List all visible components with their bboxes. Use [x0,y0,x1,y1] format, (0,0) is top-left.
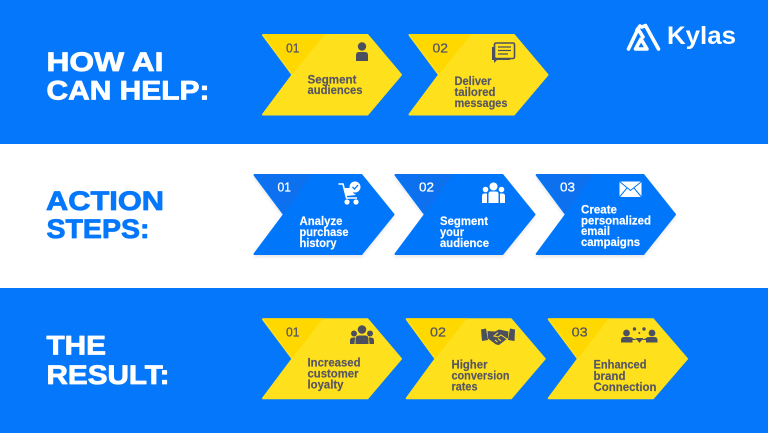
card: increased customer loyalty: customer [308,369,359,381]
icon: envelope [620,182,642,197]
card: higher conversion rates: Higher [452,360,488,372]
card: increased customer loyalty: Increased [308,358,360,370]
heading: the result: THE [46,330,106,360]
card: segment audiences [263,34,401,114]
card: segment your audience [396,174,534,254]
card: deliver tailored messages: 02 [432,40,448,56]
heading: action steps: STEPS: [46,214,150,244]
card: enhanced brand connection: 03 [572,325,588,340]
card: enhanced brand connection: Connection [594,382,656,394]
card: enhanced brand connection: Enhanced [594,360,646,372]
panel: action steps band [0,144,768,288]
card: segment audiences: Segment [308,74,357,86]
card: create personalized email campaigns: personalized [581,215,651,227]
icon: handshake [481,328,515,345]
card: create personalized email campaigns: campaigns [581,237,640,249]
logo: Kylas: Kylas [667,22,736,50]
card: analyze purchase history: 01 [278,180,291,195]
icon: person [356,42,368,61]
card: segment your audience: your [440,227,465,239]
logo: Kylas [628,22,736,50]
card: higher conversion rates: 02 [430,325,446,340]
card: segment audiences: 01 [286,40,300,56]
card: deliver tailored messages: messages [454,98,508,110]
card: analyze purchase history: purchase [300,227,348,239]
panel: how AI can help band [0,0,768,144]
icon: audience group [482,182,505,203]
card: deliver tailored messages: Deliver [454,76,492,88]
card: deliver tailored messages: tailored [454,87,496,99]
heading: action steps: ACTION [46,186,164,216]
heading: action steps [46,186,164,244]
icon: brand connection [621,327,658,343]
card: higher conversion rates [407,318,545,398]
card: higher conversion rates: conversion [452,370,510,382]
card: enhanced brand connection: brand [594,371,626,383]
heading: the result [46,330,170,390]
card: analyze purchase history [254,174,394,254]
card: segment your audience: Segment [440,216,488,228]
icon: customer group [350,325,374,344]
card: increased customer loyalty [263,318,401,398]
panel: the result band [0,288,768,433]
card: analyze purchase history: Analyze [300,216,342,228]
card: create personalized email campaigns: Create [581,204,617,216]
icon: chat bubbles [492,43,514,63]
heading: the result: RESULT: [46,360,170,390]
card: higher conversion rates: rates [452,382,478,394]
card: increased customer loyalty: 01 [286,325,300,340]
heading: how AI can help [46,47,210,106]
card: create personalized email campaigns [537,174,675,254]
card: deliver tailored messages [410,34,548,114]
icon: shopping cart with check [338,182,360,205]
heading: how AI can help: HOW AI [46,47,164,77]
card: segment your audience: 02 [419,180,434,195]
card: segment audiences: audiences [308,85,362,97]
card: create personalized email campaigns: 03 [560,180,575,195]
card: enhanced brand connection [549,318,687,398]
card: increased customer loyalty: loyalty [308,380,344,392]
heading: how AI can help: CAN HELP: [46,76,210,106]
card: create personalized email campaigns: email [581,226,610,238]
card: segment your audience: audience [440,238,489,250]
card: analyze purchase history: history [300,238,337,250]
